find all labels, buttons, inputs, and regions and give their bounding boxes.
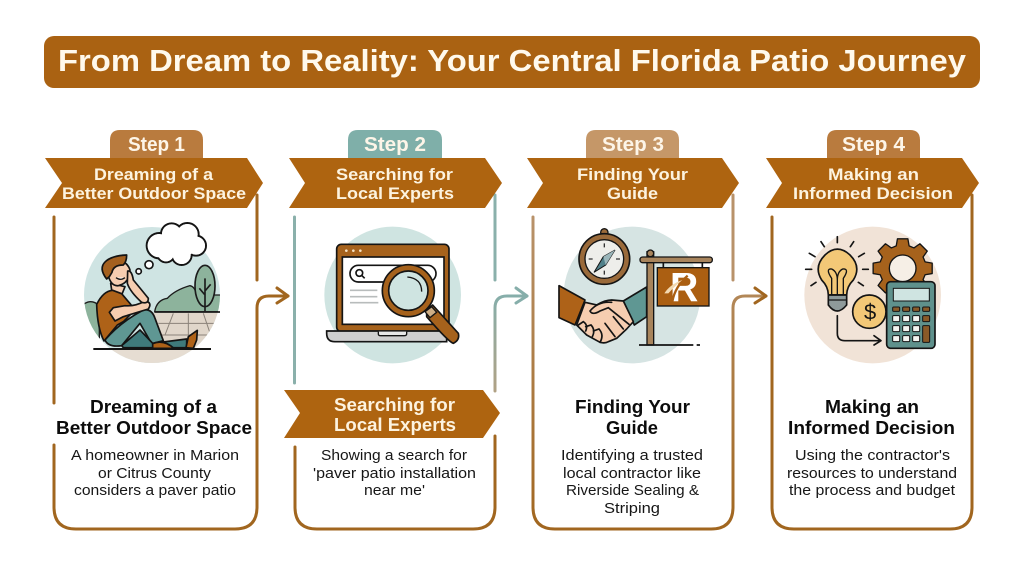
title banner: [44, 36, 980, 88]
step 2 description: 'paver patio installation: [313, 466, 476, 482]
icon: laptop search with magnifier: [324, 227, 461, 363]
step 4 heading: [788, 397, 955, 438]
step 4 description: [787, 448, 957, 499]
step 4 heading: Making an: [825, 397, 919, 417]
title banner: From Dream to Reality: Your Central Florida Patio Journey: [58, 43, 967, 78]
step 2 description: Showing a search for: [321, 448, 467, 464]
step 3 tab: Step 3: [602, 134, 664, 156]
step 4 ribbon: Informed Decision: [793, 184, 953, 203]
step 3 description: [561, 448, 703, 517]
step 3 heading: Finding Your: [575, 397, 690, 417]
step 1 description: or Citrus County: [98, 466, 212, 482]
step 3 description: Identifying a trusted: [561, 448, 703, 464]
step 1 heading: Dreaming of a: [90, 397, 218, 417]
step 3 ribbon: Finding Your: [577, 165, 688, 184]
step 4 outline: [772, 195, 972, 529]
panel: step 3: [527, 130, 766, 529]
step 2 repeated ribbon: Searching for: [334, 395, 455, 415]
step 2 ribbon: Local Experts: [336, 184, 454, 203]
step 1 tab: Step 1: [128, 134, 185, 156]
step 2 outline and arrow: [294, 195, 527, 529]
panel: step 4: [766, 130, 979, 529]
step 1 ribbon: Better Outdoor Space: [62, 184, 246, 203]
icon: man dreaming of a patio: [80, 223, 224, 365]
step 1 description: A homeowner in Marion: [71, 448, 239, 464]
step 4 ribbon: Making an: [828, 165, 919, 184]
step 4 description: Using the contractor's: [795, 448, 950, 464]
step 3 heading: [575, 397, 690, 438]
logo: R: R: [670, 264, 698, 310]
step 1 heading: [56, 397, 252, 438]
step 2 repeated ribbon: Local Experts: [334, 415, 456, 435]
step 1 description: [71, 448, 239, 499]
step 1 ribbon: Dreaming of a: [94, 165, 214, 184]
step 3 description: local contractor like: [563, 466, 701, 482]
step 4 heading: Informed Decision: [788, 418, 955, 438]
step 1 heading: Better Outdoor Space: [56, 418, 252, 438]
step 2 repeated ribbon: [284, 390, 500, 438]
step 2 ribbon: [289, 158, 502, 208]
step 4 description: the process and budget: [789, 483, 955, 499]
step 4 ribbon: [766, 158, 979, 208]
step 2 description: near me': [364, 483, 425, 499]
step 1 ribbon: [45, 158, 263, 208]
icon: handshake, compass and contractor sign: [559, 227, 712, 363]
step 2 description: [313, 448, 476, 499]
step 3 ribbon: [527, 158, 739, 208]
step 3 heading: Guide: [606, 418, 658, 438]
panel: step 1: [45, 130, 288, 529]
step 4 tab: Step 4: [842, 134, 906, 156]
step 3 outline and arrow: [533, 195, 766, 529]
step 4 description: resources to understand: [787, 466, 957, 482]
step 2 ribbon: Searching for: [336, 165, 453, 184]
step 1 outline and arrow: [54, 195, 288, 529]
step 1 description: considers a paver patio: [74, 483, 236, 499]
thought cloud: [147, 223, 206, 265]
step 2 tab: Step 2: [364, 134, 426, 156]
step 2 tab: [348, 130, 442, 158]
step 3 description: Striping: [604, 501, 660, 517]
panel: step 2: [284, 130, 527, 529]
step 4 tab: [827, 130, 920, 158]
step 3 ribbon: Guide: [607, 184, 658, 203]
step 1 tab: [110, 130, 203, 158]
step 3 description: Riverside Sealing &: [566, 483, 699, 499]
icon: light bulb, gear, coin and calculator: $: [864, 299, 876, 324]
icon: light bulb, gear, coin and calculator: [804, 227, 941, 363]
step 3 tab: [586, 130, 679, 158]
